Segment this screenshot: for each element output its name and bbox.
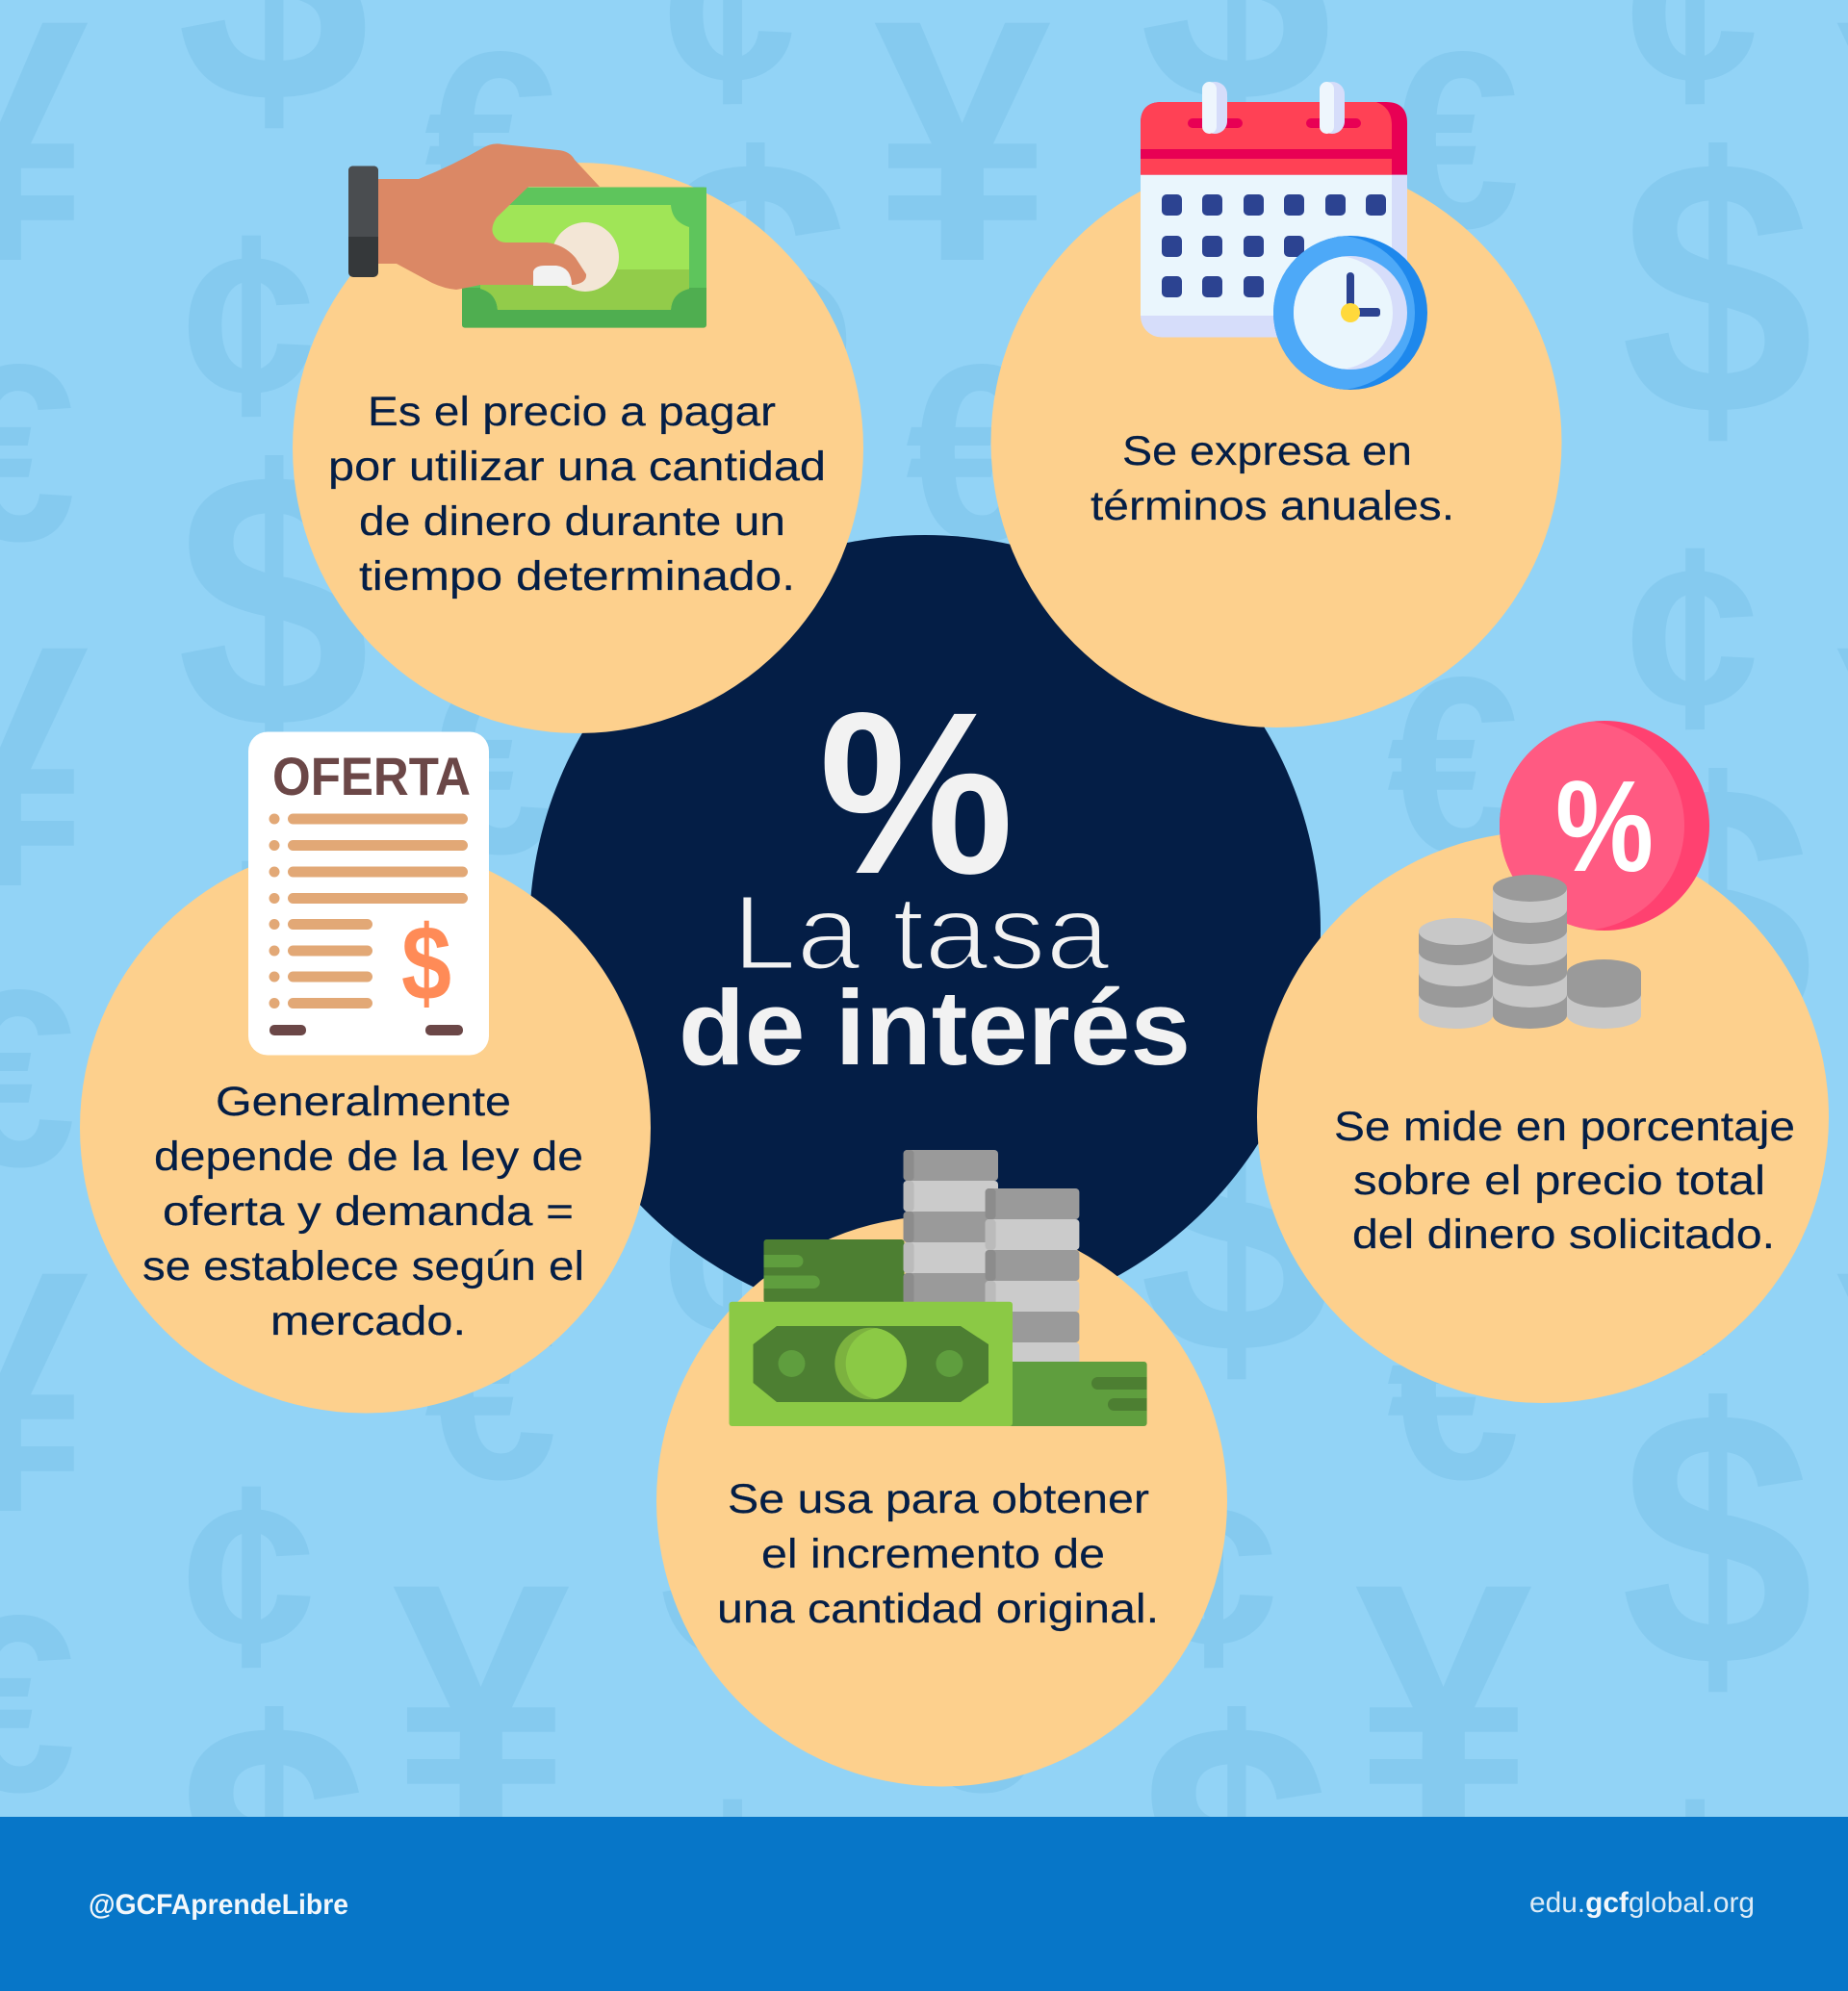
text: oferta y demanda: oferta y demanda =	[163, 1188, 574, 1235]
text: ¢¢	[664, 1118, 1759, 1406]
text: oferta y demanda: mercado.	[270, 1298, 466, 1344]
text: €€	[424, 625, 1520, 906]
text: $$	[658, 1333, 1813, 1743]
panel: porcentaje	[1257, 721, 1829, 1403]
title: de interés: de interés	[679, 969, 1191, 1087]
label: OFERTA: OFERTA	[272, 746, 471, 806]
text: ¥¥	[392, 887, 1535, 1272]
text: ¢¢	[664, 493, 1759, 780]
text: precio a pagar: por utilizar una cantidad	[328, 444, 826, 490]
icon: large percent sign: %	[819, 664, 1014, 922]
text: ¢¢	[183, 1431, 1278, 1719]
footer: social handle: @GCFAprendeLibre	[89, 1889, 348, 1921]
icon: coin stacks	[1419, 875, 1641, 1029]
panel: términos anuales	[991, 82, 1561, 727]
text: ¥¥	[392, 262, 1535, 647]
text: incremento: una cantidad original.	[717, 1586, 1159, 1632]
text: oferta y demanda	[142, 1079, 584, 1344]
text: €€	[424, 0, 1520, 281]
footer bar	[0, 1817, 1848, 1991]
icon: pink percent coin	[1500, 721, 1709, 931]
text: porcentaje	[1334, 1104, 1795, 1258]
text: precio a pagar: tiempo determinado.	[359, 553, 795, 600]
text: ¥¥	[392, 1513, 1535, 1898]
text: precio a pagar: Es el precio a pagar	[368, 389, 776, 435]
panel: central navy circle with title	[529, 535, 1321, 1326]
text: términos anuales	[1091, 428, 1454, 529]
title: La tasa: La tasa	[732, 874, 1111, 992]
icon: hand holding money	[348, 143, 706, 328]
text: precio a pagar	[328, 389, 826, 600]
text: $$	[658, 707, 1813, 1117]
text: ¢¢	[183, 180, 1278, 468]
text: oferta y demanda: depende de la ley de	[154, 1134, 583, 1180]
text: precio a pagar: de dinero durante un	[359, 498, 785, 545]
icon: money and coins	[730, 1150, 1147, 1426]
panel: oferta y demanda	[80, 731, 651, 1413]
text: oferta y demanda: Generalmente	[216, 1079, 511, 1125]
text: $$	[658, 82, 1813, 492]
text: porcentaje: Se mide en porcentaje	[1334, 1104, 1795, 1150]
icon: calendar with clock	[1141, 82, 1427, 390]
icon: pink percent coin: %	[1555, 753, 1654, 899]
icon: offer receipt	[248, 731, 489, 1055]
panel: precio a pagar	[293, 143, 863, 733]
text: incremento	[717, 1476, 1159, 1632]
text: términos anuales: Se expresa en	[1122, 428, 1412, 474]
text: términos anuales: términos anuales.	[1091, 483, 1454, 529]
text: porcentaje: sobre el precio total	[1353, 1158, 1765, 1204]
text: incremento: el incremento de	[761, 1531, 1105, 1577]
text: ¢¢	[183, 805, 1278, 1093]
text: $$	[177, 395, 1332, 804]
text: $$	[177, 1020, 1332, 1430]
text: €€	[424, 1251, 1520, 1532]
text: incremento: Se usa para obtener	[728, 1476, 1149, 1522]
text: oferta y demanda: se establece según el	[142, 1243, 584, 1289]
icon: dollar sign: $	[401, 905, 451, 1023]
footer: website: edu.gcfglobal.org	[1529, 1887, 1755, 1919]
text: porcentaje: del dinero solicitado.	[1352, 1212, 1775, 1258]
panel: incremento	[656, 1150, 1227, 1786]
